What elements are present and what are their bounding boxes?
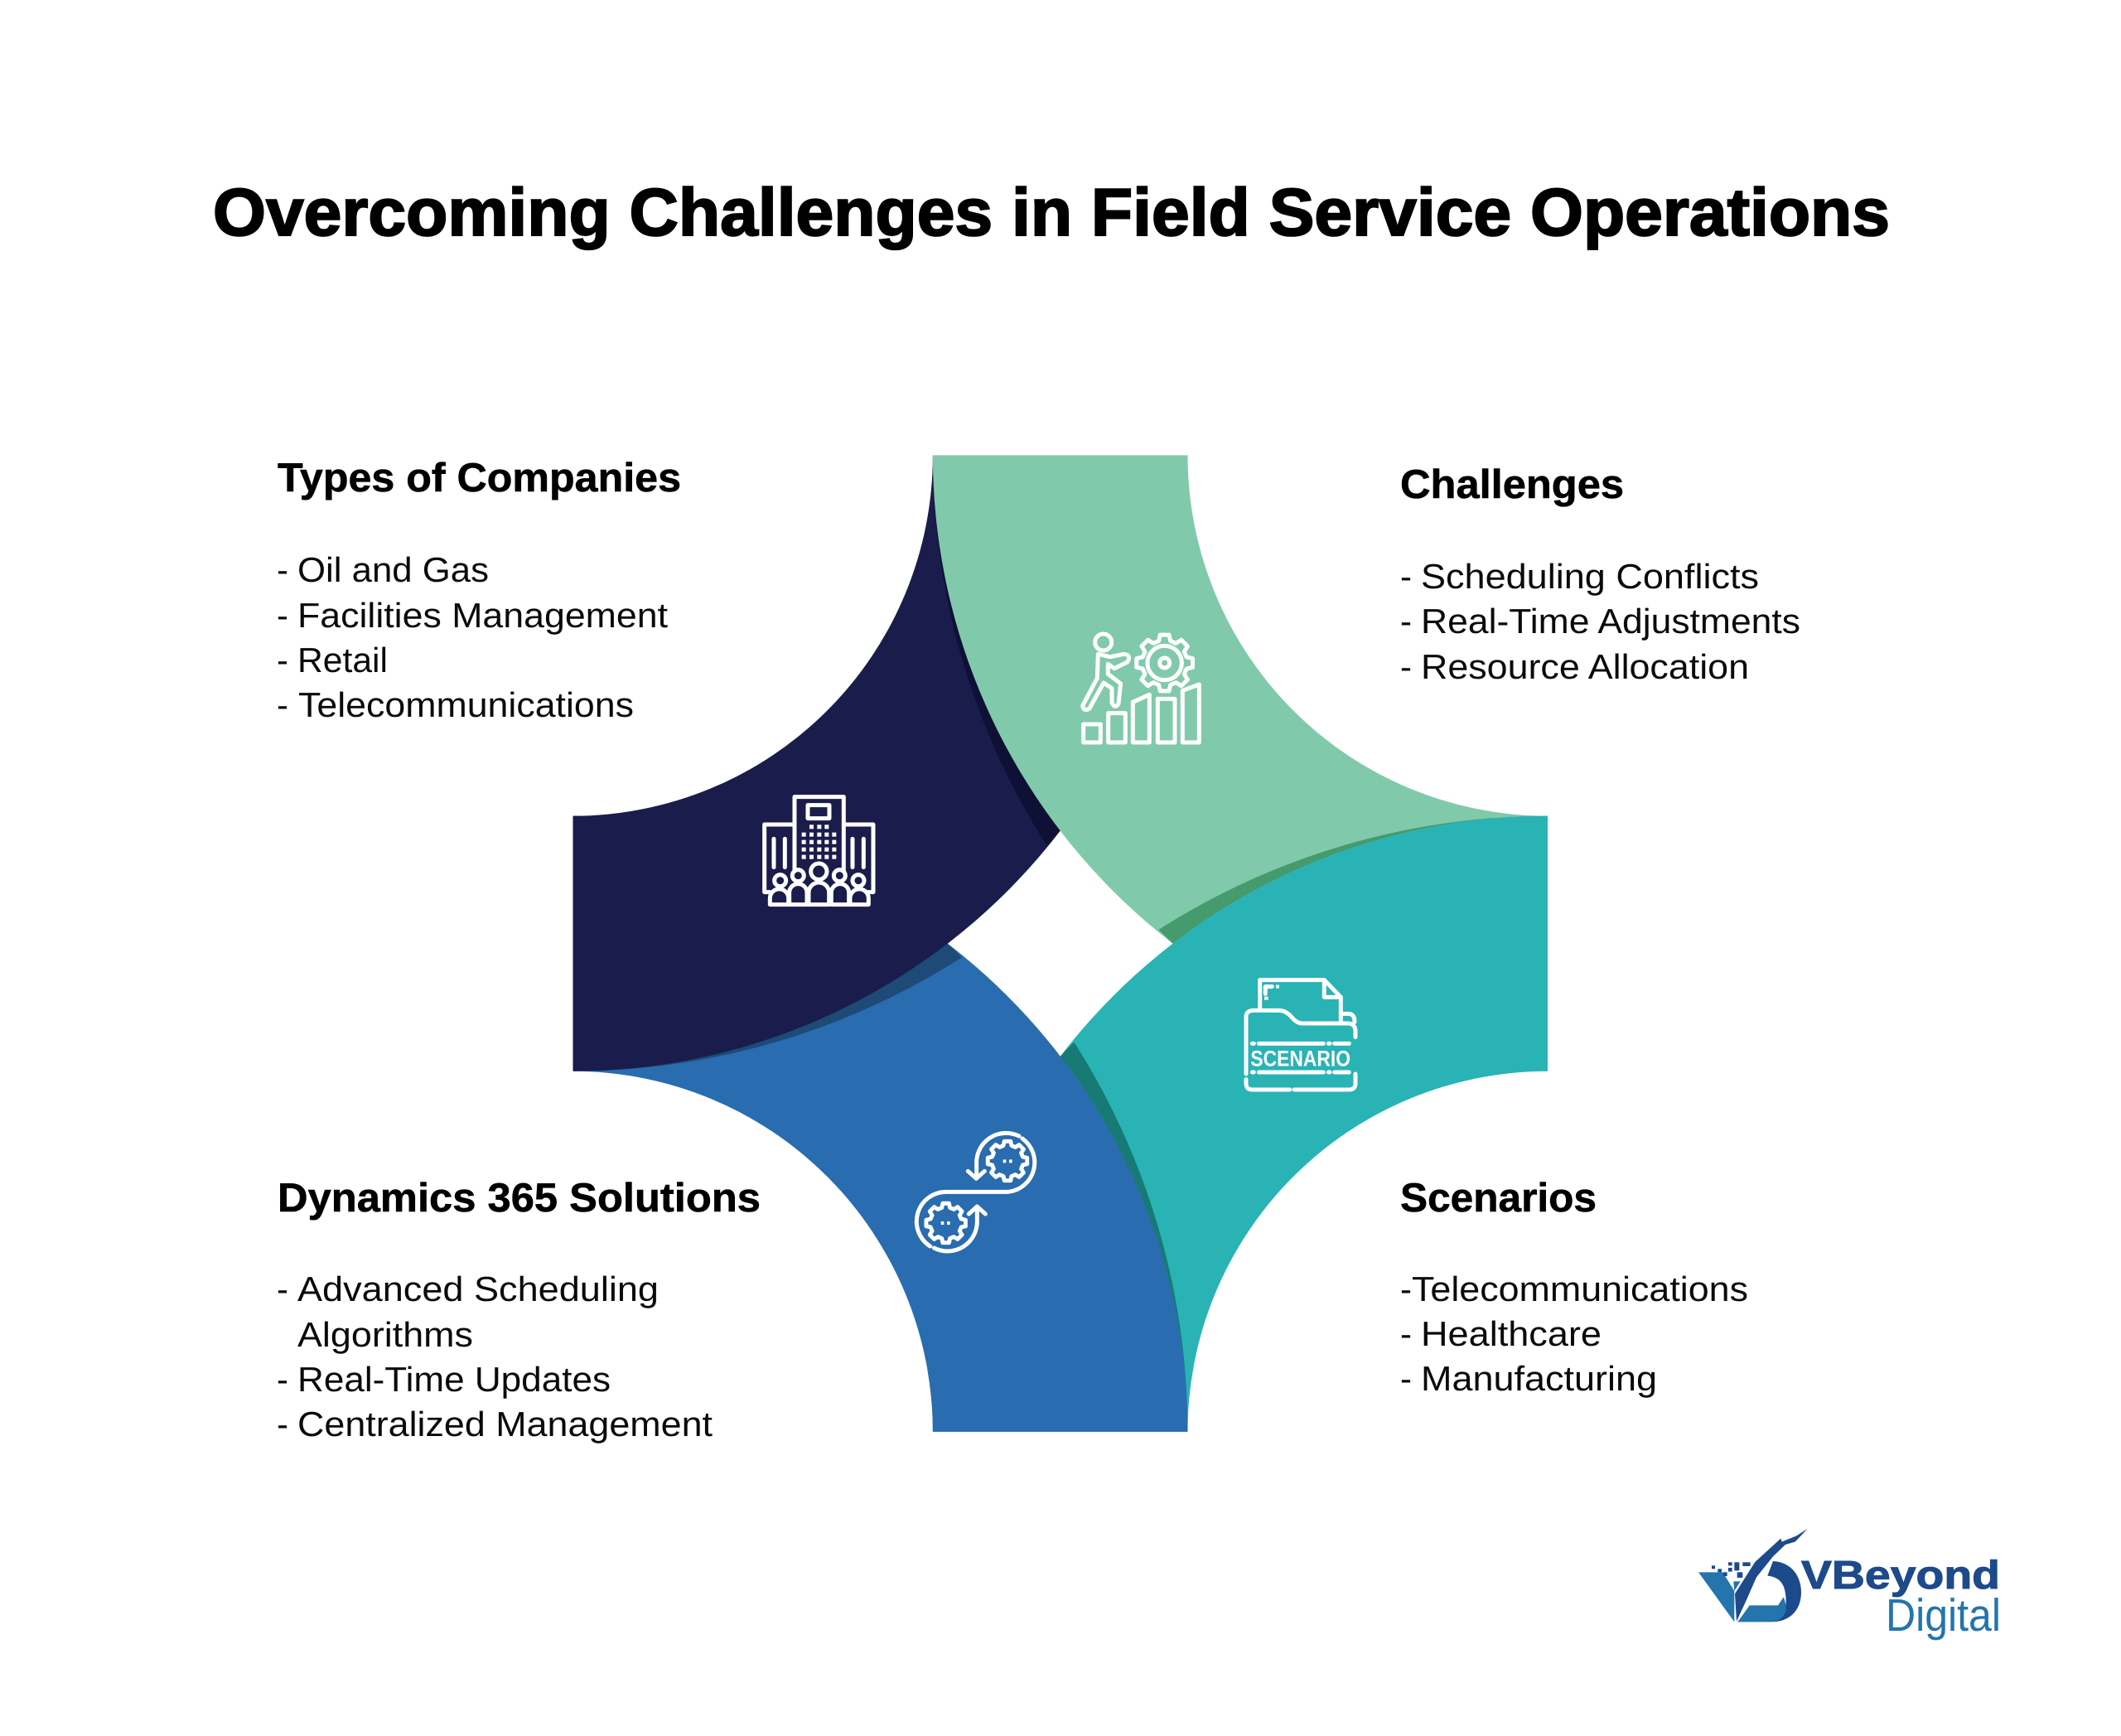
list: Centralized Management [297,1405,713,1443]
icon: climbing person with gear and bars [1083,634,1199,742]
list: Scheduling Conflicts [1421,557,1759,596]
list: - [1400,557,1412,596]
list [277,1269,713,1443]
logo: VBeyond Digital [1698,1529,2001,1641]
list: Resource Allocation [1421,647,1749,686]
panel: types of companies [277,456,681,724]
list: Advanced Scheduling [297,1269,659,1308]
petal: green, Challenges [933,456,1548,1071]
list: - [1400,1359,1412,1398]
heading: Challenges [1400,462,1624,507]
panel: scenarios [1400,1176,1748,1398]
icon label: SCENARIO: SCENARIO [1250,1047,1350,1071]
list: - [1400,602,1412,641]
list: - [277,641,288,679]
list: - [1400,1314,1412,1353]
list [277,550,668,724]
list: - [1400,1269,1412,1308]
list: Real-Time Adjustments [1421,602,1800,641]
list: - [277,1405,288,1443]
list: - [277,1360,288,1399]
panel: challenges [1400,462,1800,686]
list: Real-Time Updates [297,1360,611,1399]
heading: Scenarios [1400,1176,1597,1221]
blue petal overlap above teal [928,993,1188,1432]
heading: Types of Companies [278,456,681,500]
list: - [1400,647,1412,686]
list: - [277,685,288,724]
list: - [277,550,288,589]
list: Facilities Management [297,596,668,635]
list: - [277,1269,288,1308]
list: Retail [297,641,388,679]
list: Manufacturing [1421,1359,1657,1398]
panel: dynamics 365 solutions [277,1176,761,1443]
list: Oil and Gas [297,550,489,589]
list: Healthcare [1421,1314,1602,1353]
icon: scenario folder [1246,980,1355,1090]
shadow on green petal [1158,816,1548,944]
petal: navy, Types of Companies [573,456,1188,1071]
icon: continuous improvement loop [916,1133,1035,1251]
logo wordmark: Digital: Digital [1886,1589,2001,1641]
list: Telecommunications [298,685,634,724]
list: - [277,596,288,635]
list [1400,557,1800,686]
logo wordmark: VBeyond: VBeyond [1801,1554,2000,1598]
list: Telecommunications [1412,1269,1748,1308]
icon: office buildings with people [765,797,873,905]
logo mark [1698,1529,1808,1622]
petal: blue, Dynamics 365 Solutions [573,816,1188,1432]
petal: teal, Scenarios [933,816,1548,1432]
pinwheel diagram [573,456,1548,1432]
title: Overcoming Challenges in Field Service Operations [213,176,1890,250]
shadow on blue petal [573,944,962,1071]
shadow on navy petal [933,456,1060,845]
shadow on teal petal [1060,1042,1188,1432]
heading: Dynamics 365 Solutions [278,1176,761,1221]
list [1400,1269,1748,1398]
list: Algorithms [297,1315,473,1354]
